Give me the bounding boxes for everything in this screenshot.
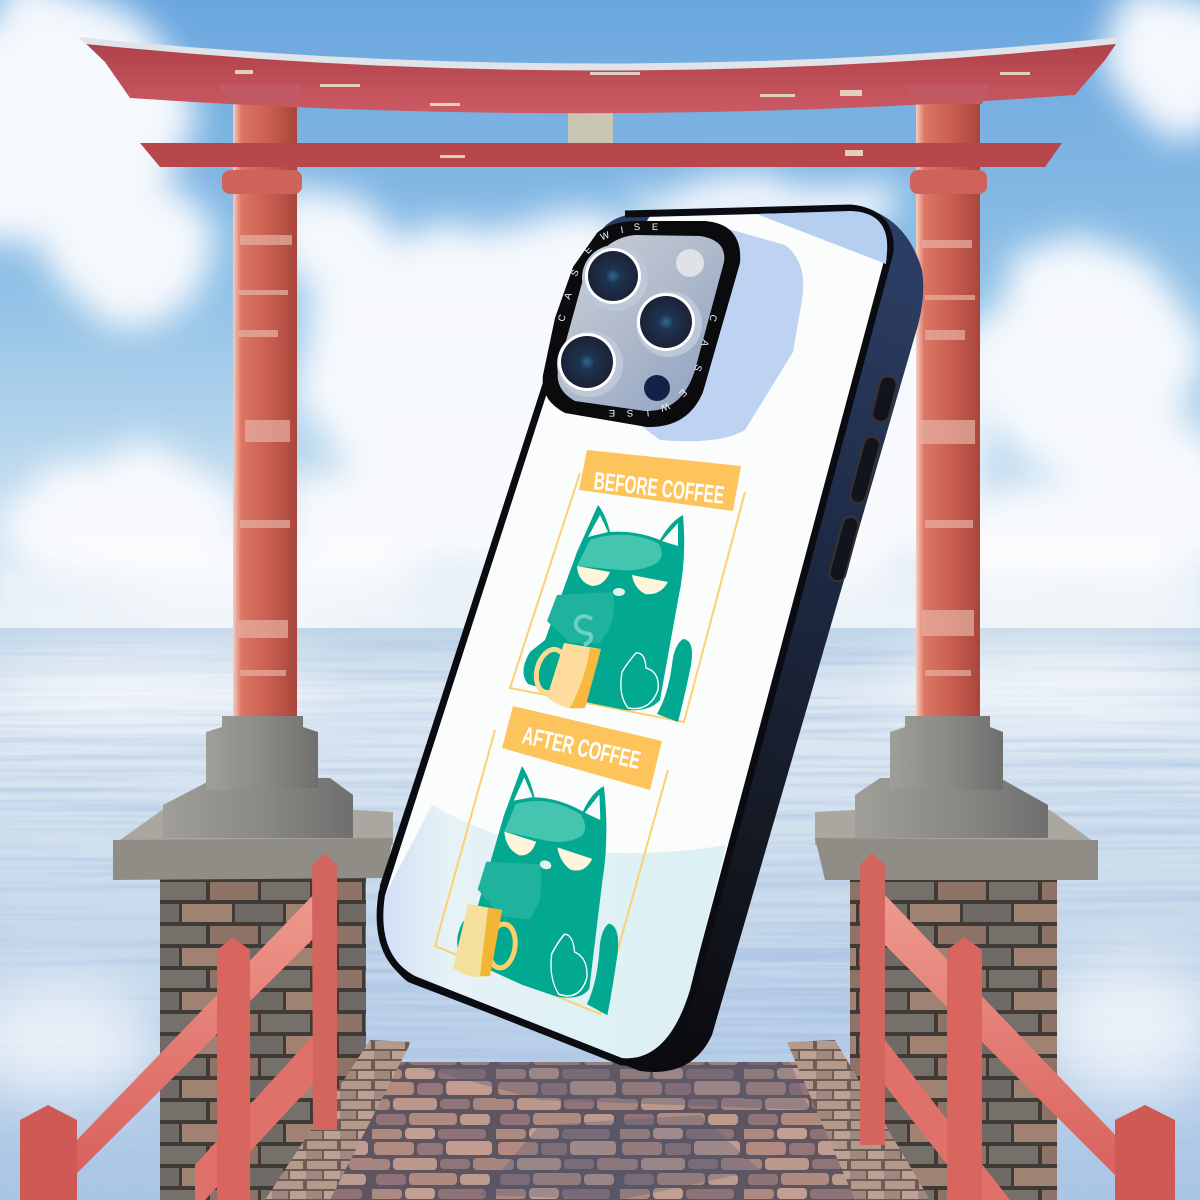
sky: [0, 0, 1200, 630]
inner black rim: [380, 208, 890, 1062]
right stone tier: [855, 778, 1048, 838]
sea: [0, 628, 1200, 1200]
CASEWISE ring text: E: [652, 222, 658, 233]
CASEWISE ring text: I: [620, 225, 624, 236]
camera shadow: [640, 228, 803, 441]
cobbles: [320, 1062, 870, 1200]
left stone block: [206, 716, 318, 790]
banner: [579, 450, 741, 511]
horizon haze: [0, 570, 1200, 626]
right brick column: [850, 878, 1057, 1200]
left pillar: [233, 100, 297, 718]
torii gate: [78, 37, 1122, 718]
lower tint reflection: [383, 805, 726, 1058]
CASEWISE ring text: A: [698, 338, 711, 348]
right railing: [860, 853, 1175, 1200]
CASEWISE ring text: I: [646, 407, 650, 418]
top edge highlight: [78, 37, 1122, 70]
pillar weathering: [238, 235, 975, 676]
back panel: [383, 211, 887, 1058]
upper rail: [865, 895, 1120, 1180]
panel: after coffee: [435, 706, 668, 1017]
action button: [871, 375, 898, 423]
left brick column: [160, 878, 366, 1200]
CASEWISE ring text: E: [677, 387, 689, 399]
frame: [510, 473, 745, 722]
mug handle: [486, 922, 518, 970]
upper rail: [75, 890, 337, 1175]
deeper ripples: [340, 940, 860, 1070]
right stone block: [890, 716, 1003, 790]
post near: [1115, 1105, 1175, 1200]
flash: [676, 249, 704, 277]
puddle shadow: [480, 1115, 760, 1200]
CASEWISE ring text: W: [599, 230, 611, 243]
sensor: [644, 375, 670, 401]
centre strut: [568, 105, 613, 143]
water ripples: [0, 640, 1200, 1200]
CASEWISE ring text: S: [633, 222, 641, 233]
mug: [547, 643, 601, 709]
left stone tier: [163, 778, 353, 838]
steam: [576, 616, 592, 645]
volume down: [828, 515, 860, 583]
right plinth top: [815, 810, 1098, 845]
right pedestal: [815, 716, 1098, 1200]
grumpy cat: [523, 505, 692, 722]
banner text: BEFORE COFFEE: [592, 467, 726, 510]
CASEWISE ring text: W: [659, 400, 671, 413]
CASEWISE ring text: S: [691, 363, 704, 373]
post far: [312, 853, 337, 1130]
CASEWISE ring text: E: [582, 244, 594, 256]
CASEWISE ring text: C: [706, 313, 719, 323]
cloud reflections: [0, 645, 1200, 1100]
left pedestal: [113, 716, 393, 1200]
CASEWISE ring text: E: [609, 407, 615, 418]
volume up: [848, 435, 882, 505]
mug: [453, 904, 502, 977]
camera ring: [543, 221, 740, 427]
CASEWISE ring text: C: [556, 313, 569, 323]
left railing: [20, 853, 337, 1200]
right curb: [787, 1040, 930, 1200]
post middle: [217, 937, 250, 1200]
walkway shadow: [400, 1062, 810, 1110]
post middle: [947, 937, 982, 1200]
top beam: [80, 38, 1120, 113]
frame: [435, 730, 668, 1014]
right pillar: [916, 100, 980, 718]
right plinth front: [815, 838, 1098, 880]
left pillar cap: [217, 85, 302, 104]
clouds: [0, 0, 1200, 615]
case body: [379, 205, 923, 1072]
banner: [502, 706, 662, 790]
CASEWISE ring text: [556, 222, 719, 418]
CASEWISE ring text: S: [627, 407, 633, 418]
mug handle: [532, 646, 570, 696]
camera glass: [558, 235, 724, 411]
lower rail: [865, 1025, 1010, 1200]
banner text: AFTER COFFEE: [520, 722, 643, 775]
lower rail: [195, 1025, 337, 1200]
lens 3: [557, 331, 623, 397]
left plinth front: [113, 838, 393, 880]
lens 1: [582, 245, 648, 311]
phone in case: [379, 205, 923, 1072]
CASEWISE ring text: A: [562, 291, 575, 301]
grumpy cat: [450, 758, 621, 1017]
beam paint flakes: [235, 70, 1030, 158]
left plinth top: [113, 810, 393, 845]
right pillar cap: [905, 85, 990, 104]
right collar: [910, 170, 987, 194]
panel: before coffee: [510, 450, 745, 722]
lens 2: [636, 291, 702, 357]
post far: [860, 853, 885, 1145]
sky reflection top: [757, 211, 887, 264]
left curb: [265, 1040, 411, 1200]
stone walkway: [265, 1040, 930, 1200]
side buttons: [828, 375, 898, 583]
left collar: [222, 170, 302, 194]
CASEWISE ring text: S: [569, 268, 582, 278]
lower crossbeam: [140, 143, 1062, 167]
post near: [20, 1105, 77, 1200]
mug shade: [480, 908, 502, 976]
mug shade: [570, 648, 601, 708]
